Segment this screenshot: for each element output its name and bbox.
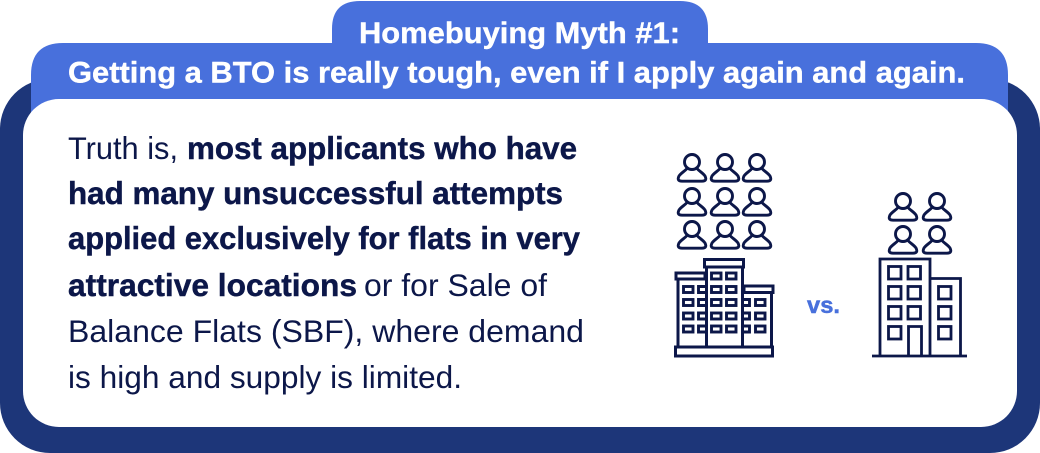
- icon: smaller apartment block: [872, 259, 967, 356]
- icon: crowd of four applicants: [889, 194, 951, 253]
- text block: truth explanation: applied exclusively for flats in very: [68, 220, 580, 256]
- icon: crowd of nine applicants: [678, 154, 771, 248]
- label: vs.: vs.: [807, 292, 840, 318]
- text block: truth explanation: most applicants who have: [187, 130, 577, 166]
- panel: white content card: [23, 99, 1017, 427]
- heading: myth number: Homebuying Myth #1:: [359, 17, 680, 50]
- text block: truth explanation: is high and supply is limited.: [68, 359, 462, 395]
- text block: truth explanation: [68, 130, 584, 395]
- text block: truth explanation: or for Sale of: [364, 267, 547, 303]
- text block: truth explanation: Balance Flats (SBF), where demand: [68, 313, 584, 349]
- icon: large apartment complex: [676, 260, 773, 356]
- text block: truth explanation: had many unsuccessful attempts: [68, 175, 563, 211]
- text block: truth explanation: attractive locations: [68, 267, 357, 303]
- heading: myth statement: Getting a BTO is really tough, even if I apply again and again.: [68, 56, 965, 90]
- text block: truth explanation: Truth is,: [68, 130, 178, 166]
- header band: [31, 1, 1008, 140]
